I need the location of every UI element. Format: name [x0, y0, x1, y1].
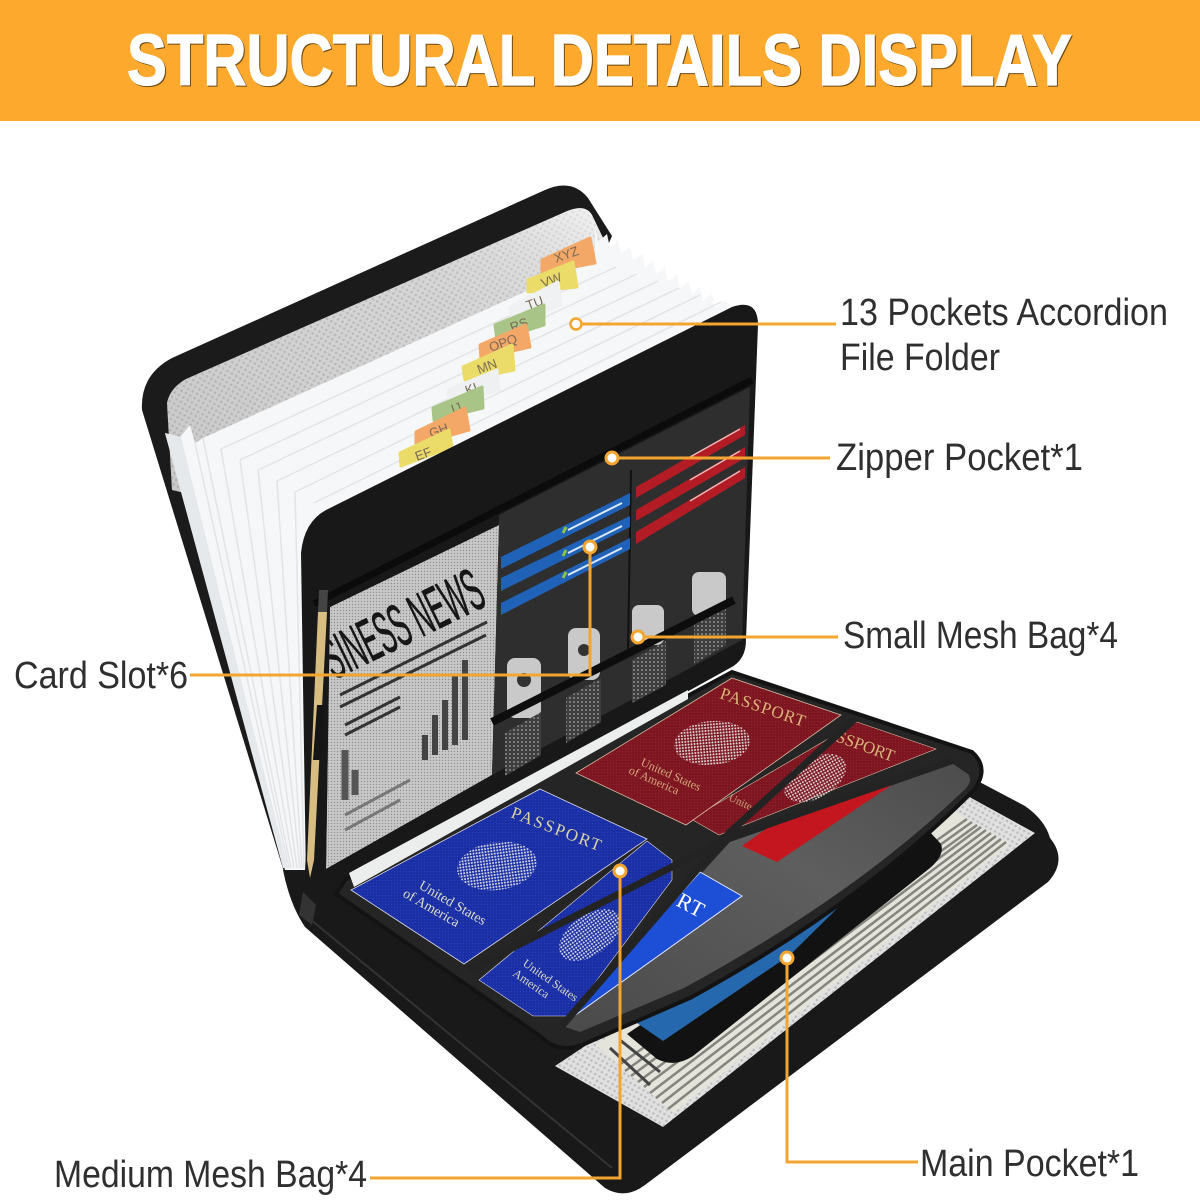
- stitch divider: [628, 470, 631, 650]
- bright blue card: [563, 872, 742, 1024]
- red passport front: PASSPORT: [718, 684, 809, 731]
- callout: medium mesh bag: Medium Mesh Bag*4: [54, 1154, 367, 1196]
- callout: 13 pockets accordion file folder: 13 Pockets Accordion: [840, 292, 1168, 334]
- pen: [307, 590, 328, 878]
- second elastic strap: [469, 760, 953, 970]
- small mesh bags: [492, 600, 734, 776]
- blue passport back: America: [510, 966, 553, 1002]
- callout: main pocket: Main Pocket*1: [920, 1143, 1139, 1185]
- callout: zipper pocket: Zipper Pocket*1: [836, 437, 1083, 479]
- index tabs: KL: [463, 378, 483, 398]
- stacked papers and money: [596, 808, 1010, 1113]
- bright red card: [742, 774, 908, 862]
- elastic straps: [561, 717, 857, 1027]
- blue passport front: [351, 789, 647, 964]
- main pocket lining: [555, 794, 1035, 1127]
- index tabs: TU: [524, 293, 545, 313]
- index tabs: RS: [508, 314, 530, 335]
- index tabs: EF: [413, 444, 434, 464]
- index tabs: OPQ: [487, 331, 519, 355]
- blue cards: [501, 493, 630, 615]
- red passport back: [691, 722, 936, 835]
- index tabs: GH: [427, 420, 450, 441]
- accordion file pages: [165, 227, 735, 870]
- index tabs: XYZ: [552, 243, 581, 266]
- mesh lining of back cover: [167, 208, 604, 520]
- red cards: [636, 425, 745, 544]
- lower pocket shade: [492, 387, 750, 775]
- callout: small mesh bag: Small Mesh Bag*4: [843, 615, 1118, 657]
- callout: small mesh bag: [632, 615, 1118, 657]
- callout: 13 pockets accordion file folder: File Folder: [840, 337, 1000, 379]
- zipper pocket panel: [301, 305, 758, 882]
- index tabs: IJ: [449, 399, 464, 417]
- red passport front: [576, 678, 841, 825]
- index tabs: VW: [539, 269, 564, 291]
- lining shading: [167, 208, 604, 520]
- white document strip: [349, 690, 688, 887]
- passport flap: [336, 672, 982, 1048]
- callout: zipper pocket: [606, 437, 1083, 479]
- zipper: [314, 380, 752, 604]
- bottom case zipper seam: [305, 915, 612, 1168]
- tablet: [627, 830, 942, 1063]
- zipper pull: [299, 892, 316, 925]
- blue passport front: United States: [416, 878, 488, 929]
- bottom case shell: [283, 760, 1059, 1193]
- callout: medium mesh bag: [54, 865, 626, 1196]
- blue passport back: [479, 841, 672, 1016]
- red passport front: United States: [639, 755, 704, 794]
- index tabs: MN: [475, 356, 499, 377]
- document mesh window with newspaper: [310, 525, 499, 869]
- red passport back: SSPORT: [834, 727, 898, 766]
- callout: 13 pockets accordion file folder: [570, 292, 1168, 379]
- index tabs: [400, 238, 595, 466]
- callout: main pocket: [781, 952, 1139, 1185]
- callout: card slot: Card Slot*6: [14, 655, 188, 697]
- bright blue card: RT: [673, 887, 710, 923]
- product: open document organizer: [142, 186, 1059, 1193]
- grey lower flap surface: [562, 764, 970, 1032]
- blue passport back: United States: [520, 956, 581, 1005]
- red passport back: United: [727, 792, 759, 816]
- blue passport front: PASSPORT: [509, 803, 605, 855]
- header banner: [0, 0, 1200, 121]
- blue passport front: of America: [400, 886, 462, 931]
- callout: card slot: [14, 541, 596, 697]
- red passport front: of America: [627, 763, 682, 798]
- zipper pocket panel: SINESS NEWS: [310, 556, 494, 692]
- back cover of case: [142, 186, 612, 900]
- USB drives: [507, 572, 726, 718]
